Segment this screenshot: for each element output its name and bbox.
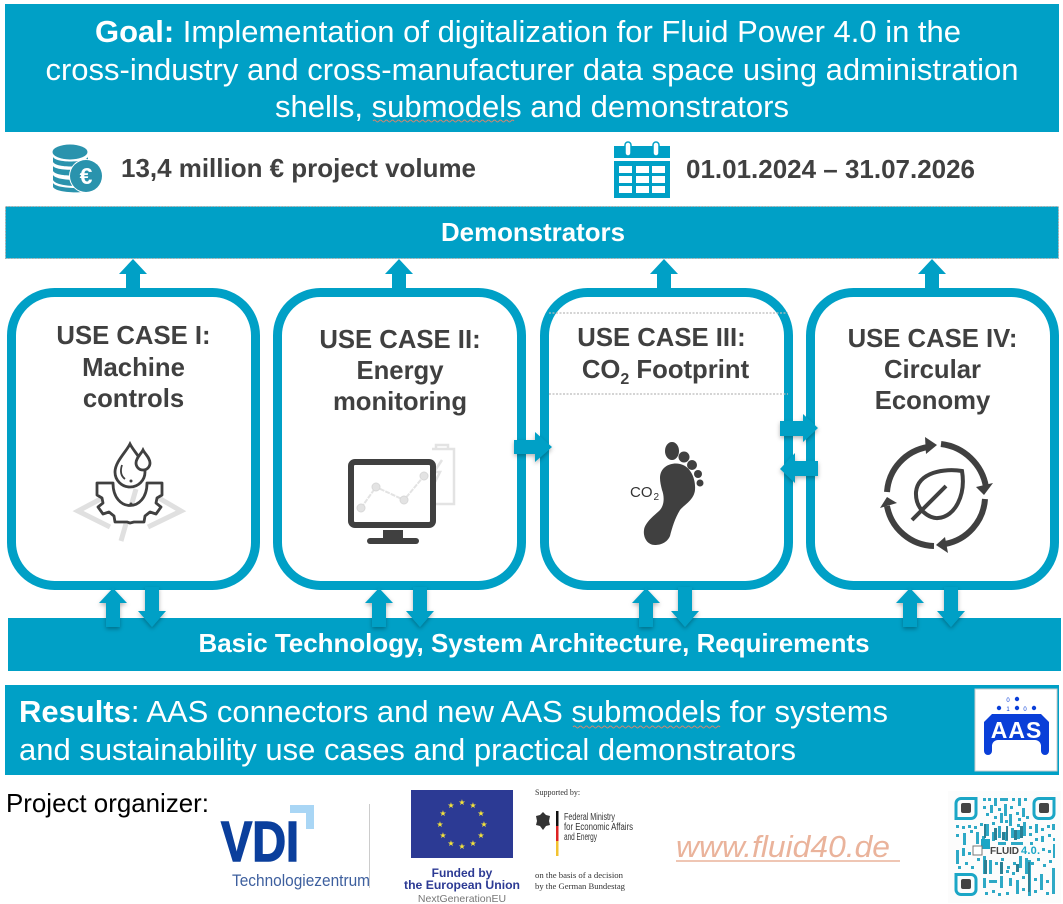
- icon: gear with oil drop: [78, 444, 181, 541]
- logo: federal ministry: by the German Bundestag: [535, 881, 626, 891]
- icon: AAS logo: [975, 689, 1057, 771]
- logo: EU flag: the European Union: [404, 878, 520, 892]
- icon: monitor with battery: [351, 445, 454, 544]
- logo: VDI Technologiezentrum: VDI: [221, 810, 299, 874]
- logo: EU flag: Funded by: [432, 866, 493, 880]
- results banner: Results: AAS connectors and new AAS submodels for systems: [19, 694, 888, 729]
- project organizer label: Project organizer:: [6, 788, 209, 818]
- logo: federal ministry: [535, 788, 633, 891]
- logo: EU flag: [404, 790, 520, 904]
- panel: use case I: [12, 292, 256, 586]
- project volume text: 13,4 million € project volume: [121, 155, 476, 183]
- logo: EU flag: ★: [469, 839, 477, 848]
- QR code: [948, 791, 1061, 903]
- panel: use case II: monitoring: [333, 388, 467, 416]
- logo: EU flag: ★: [477, 831, 485, 840]
- logo: EU flag: ★: [480, 820, 488, 829]
- panel: use case III: Footprint: [629, 356, 750, 384]
- results banner: [5, 685, 1059, 775]
- panel: use case IV: Economy: [875, 387, 991, 415]
- icon: CO2 footprint: [630, 442, 704, 545]
- icon: AAS logo: 0: [1006, 698, 1010, 704]
- panel: use case III: [544, 292, 788, 586]
- goal banner: Goal: Implementation of digitalization for Fluid Power 4.0 in the: [95, 15, 961, 49]
- panel: use case I: controls: [83, 385, 184, 413]
- basic technology bar: Basic Technology, System Architecture, Requirements: [198, 630, 870, 658]
- icon: coins: €: [80, 163, 93, 189]
- QR code: 4.0.: [1021, 845, 1040, 857]
- arrows to basic technology: [99, 587, 965, 627]
- project dates text: 01.01.2024 – 31.07.2026: [686, 156, 975, 184]
- panel: use case IV: Circular: [884, 356, 981, 384]
- logo: EU flag: ★: [477, 809, 485, 818]
- panel: use case I: Machine: [82, 354, 185, 382]
- goal banner: shells, submodels and demonstrators: [275, 90, 789, 124]
- logo: EU flag: ★: [439, 831, 447, 840]
- results banner: and sustainability use cases and practical demonstrators: [19, 732, 796, 767]
- QR code: FLUID: [990, 846, 1019, 857]
- logo: EU flag: ★: [436, 820, 444, 829]
- logo: federal ministry: on the basis of a decision: [535, 870, 624, 880]
- arrows between use cases: [514, 414, 818, 483]
- panel: use case II: Energy: [356, 357, 444, 385]
- icon: coins: [52, 144, 103, 193]
- logo: EU flag: ★: [458, 798, 466, 807]
- basic technology bar: [8, 618, 1061, 671]
- panel: use case II: USE CASE II:: [319, 326, 481, 354]
- demonstrators bar: [6, 206, 1058, 258]
- logo: EU flag: ★: [447, 801, 455, 810]
- icon: AAS logo: 0: [1023, 707, 1027, 713]
- logo: EU flag: ★: [447, 839, 455, 848]
- arrows to demonstrators: [119, 259, 946, 290]
- icon: CO2 footprint: 2: [654, 492, 660, 503]
- demonstrators bar: Demonstrators: [441, 219, 625, 247]
- icon: circular leaf: [880, 437, 993, 553]
- panel: use case III: USE CASE III:: [577, 324, 746, 352]
- panel: use case IV: USE CASE IV:: [848, 325, 1017, 353]
- panel: use case II: [278, 292, 522, 586]
- icon: AAS logo: AAS: [991, 717, 1042, 743]
- logo: federal ministry: and Energy: [564, 832, 597, 843]
- website link: www.fluid40.de: [676, 829, 890, 864]
- panel: use case III: 2: [620, 371, 629, 388]
- logo: federal ministry: Supported by:: [535, 788, 580, 797]
- icon: CO2 footprint: CO: [630, 484, 652, 501]
- logo: EU flag: ★: [439, 809, 447, 818]
- logo: VDI Technologiezentrum: [221, 804, 370, 890]
- panel: use case IV: [810, 292, 1054, 586]
- goal banner: [5, 4, 1059, 132]
- goal banner: cross-industry and cross-manufacturer data space using administration: [46, 53, 1018, 87]
- panel: use case I: USE CASE I:: [56, 322, 211, 350]
- logo: VDI Technologiezentrum: Technologiezentrum: [232, 872, 370, 890]
- logo: EU flag: ★: [458, 842, 466, 851]
- logo: federal ministry: Federal Ministry: [564, 812, 615, 823]
- panel: use case III: CO: [582, 356, 620, 384]
- logo: EU flag: ★: [469, 801, 477, 810]
- logo: federal ministry: for Economic Affairs: [564, 822, 633, 833]
- icon: calendar: [614, 142, 670, 198]
- icon: AAS logo: 1: [1006, 707, 1010, 713]
